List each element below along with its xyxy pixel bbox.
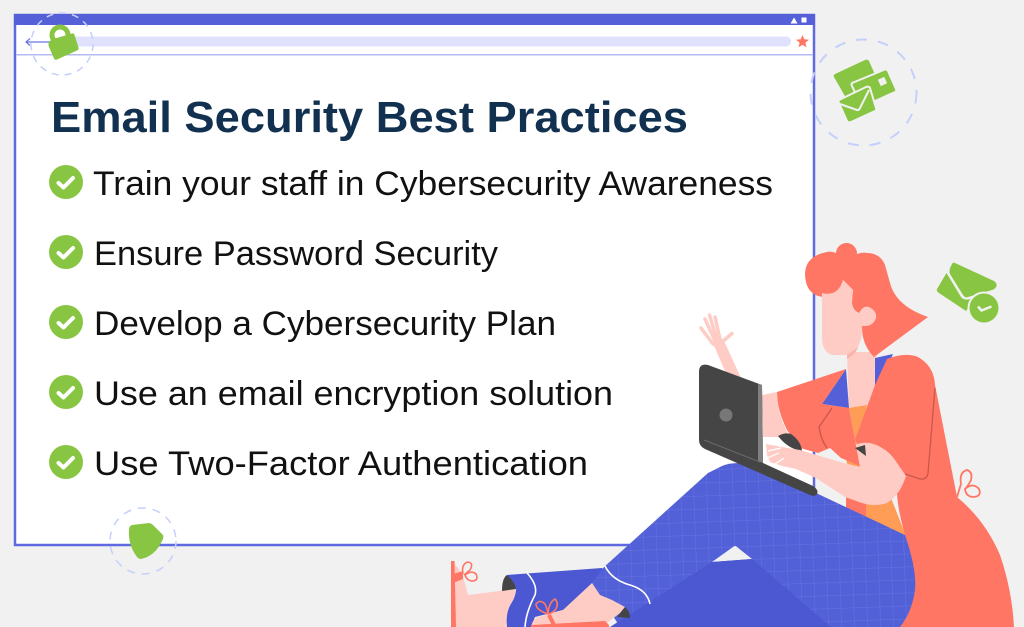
item 3: Develop a Cybersecurity Plan: [94, 305, 556, 343]
window controls: [790, 18, 806, 24]
dark inner triangle: [855, 445, 866, 456]
item 5: Use Two-Factor Authentication: [94, 445, 588, 483]
ear: [859, 307, 876, 326]
jacket fold lines: [819, 388, 935, 479]
icon: envelope with check: [937, 263, 1000, 324]
chin shadow: [847, 347, 858, 359]
dark sleeve shadow: [778, 433, 802, 451]
left foot: [451, 561, 516, 627]
background gap between legs: [712, 546, 752, 562]
item 4: Use an email encryption solution: [94, 375, 613, 413]
left arm: [762, 392, 790, 437]
raised hand: [701, 315, 741, 378]
small bow: [957, 470, 980, 497]
icon: envelopes: [810, 40, 916, 146]
item 2: Ensure Password Security: [94, 235, 498, 273]
icon: shield: [110, 508, 176, 574]
orange top: [846, 405, 906, 536]
illustration: woman with laptop: [451, 243, 1014, 627]
thigh with grid: [592, 463, 915, 627]
item 1: Train your staff in Cybersecurity Awareness: [93, 165, 773, 203]
star icon: [796, 35, 809, 47]
checklist: [49, 165, 773, 483]
back arrow: [26, 38, 50, 46]
address bar: [60, 36, 791, 46]
trouser seams: [525, 566, 650, 627]
blue collar: [822, 354, 893, 408]
toolbar divider: [16, 54, 813, 56]
browser title bar: [14, 14, 815, 25]
lower leg: [610, 559, 831, 627]
blue trouser leg, left: [507, 568, 625, 627]
icon: padlock: [31, 13, 93, 75]
laptop: [699, 365, 818, 496]
right foot: [531, 583, 630, 627]
hair: [805, 243, 928, 359]
face: [822, 280, 862, 355]
forearm and hand: [766, 443, 906, 505]
neck: [847, 352, 880, 410]
panel: browser window: [14, 14, 815, 545]
jacket: [777, 355, 1014, 627]
title: Email Security Best Practices: [51, 93, 688, 142]
